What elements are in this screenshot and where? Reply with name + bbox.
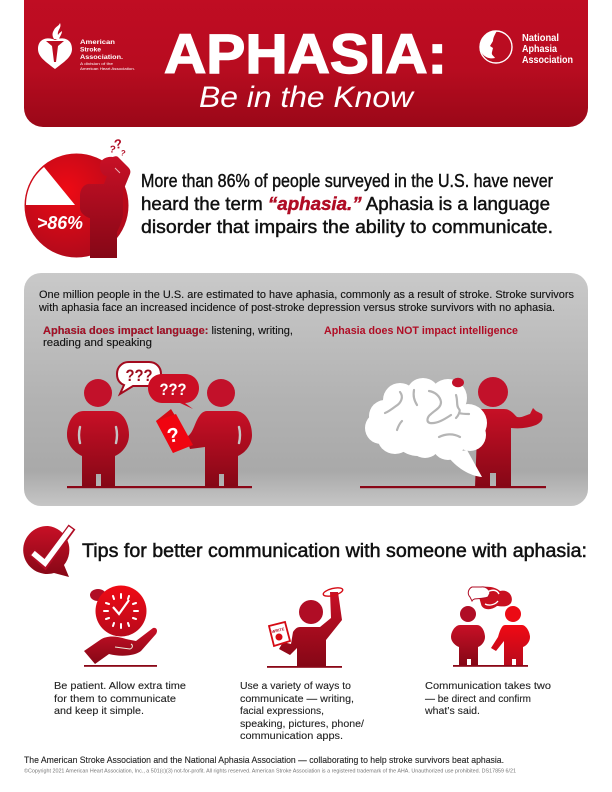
pie chart icon with confused person: ? [120, 148, 127, 158]
tip: be patient: and keep it simple. [54, 705, 144, 717]
tip: variety of ways: Use a variety of ways to [240, 680, 351, 692]
illustration: two people talking [67, 362, 252, 488]
tip: variety of ways: facial expressions, [240, 705, 324, 717]
tip: be patient: for them to communicate [54, 693, 176, 705]
intro text: One million people in the U.S. are estimated to have aphasia, commonly as a result of stroke. Stroke survivors [39, 289, 574, 301]
American Stroke Association logo [38, 23, 135, 71]
subtitle: Be in the Know [199, 81, 415, 114]
book [156, 409, 190, 453]
intelligence text: Aphasia does NOT impact intelligence [324, 325, 518, 337]
American Stroke Association logo: Stroke [80, 46, 101, 54]
American Stroke Association logo: American Heart Association. [80, 67, 135, 71]
pie chart icon with confused person: >86% [37, 213, 83, 233]
tip: variety of ways: speaking, pictures, phone/ [240, 718, 364, 730]
language impact text: Aphasia does impact language: listening, writing, [43, 325, 293, 337]
title: APHASIA: [164, 22, 447, 85]
illustration: two people talking: ? [165, 424, 181, 448]
white speech bubble [117, 362, 161, 394]
illustration: two people talking: ??? [160, 380, 186, 399]
icon: two people communicating [451, 587, 530, 667]
National Aphasia Association logo [480, 31, 573, 66]
brain [365, 378, 487, 477]
intro text: with aphasia face an increased incidence of post-stroke depression versus stroke survivors with no aphasia. [38, 302, 555, 314]
pie chart icon with confused person: ? [113, 136, 123, 152]
pie chart icon with confused person [24, 136, 130, 258]
tip: communication takes two [424, 680, 551, 717]
panel: language vs intelligence [24, 273, 588, 506]
red speech bubble [148, 374, 199, 409]
copyright line: ©Copyright 2021 American Heart Association, Inc., a 501(c)(3) not-for-profit. All rights reserved. American Stroke Association is a registered trademark of the AHA. Unauthorized use prohibited. DS17859 6/21 [24, 768, 516, 774]
tip: variety of ways [240, 680, 364, 742]
key statistic text [141, 171, 553, 237]
key statistic text: heard the term “aphasia.” Aphasia is a language [141, 194, 550, 214]
illustration: two people talking: ??? [126, 366, 152, 385]
key statistic text: disorder that impairs the ability to communicate. [141, 217, 553, 237]
intro text [38, 289, 574, 314]
pie chart icon with confused person: ? [108, 144, 116, 156]
tips check mark icon [23, 526, 72, 577]
header banner [24, 0, 588, 127]
footer statement: The American Stroke Association and the National Aphasia Association — collaborating to help stroke survivors beat aphasia. [24, 755, 504, 766]
icon: person using gestures and notes [267, 586, 344, 668]
tip: variety of ways: communicate — writing, [240, 693, 354, 705]
tip: communication takes two: — be direct and confirm [425, 693, 531, 705]
illustration: brain and person [360, 377, 546, 488]
language impact text [43, 325, 293, 349]
American Stroke Association logo: American [80, 39, 115, 46]
tip: be patient: Be patient. Allow extra time [54, 680, 186, 692]
tip: communication takes two: what’s said. [424, 705, 480, 717]
tip: communication takes two: Communication takes two [425, 680, 551, 692]
language impact text: reading and speaking [43, 337, 152, 349]
tips heading: Tips for better communication with someone with aphasia: [82, 541, 587, 562]
National Aphasia Association logo: Aphasia [522, 43, 557, 55]
tip: be patient [54, 680, 186, 717]
American Stroke Association logo: Association. [80, 54, 123, 61]
National Aphasia Association logo: Association [522, 54, 573, 66]
tip: variety of ways: communication apps. [240, 730, 343, 742]
National Aphasia Association logo: National [522, 32, 559, 44]
key statistic text: More than 86% of people surveyed in the U.S. have never [141, 171, 553, 191]
icon: clock over hand [84, 586, 157, 667]
American Stroke Association logo: A division of the [80, 62, 113, 66]
icon: person using gestures and notes: WRITE [271, 626, 285, 634]
